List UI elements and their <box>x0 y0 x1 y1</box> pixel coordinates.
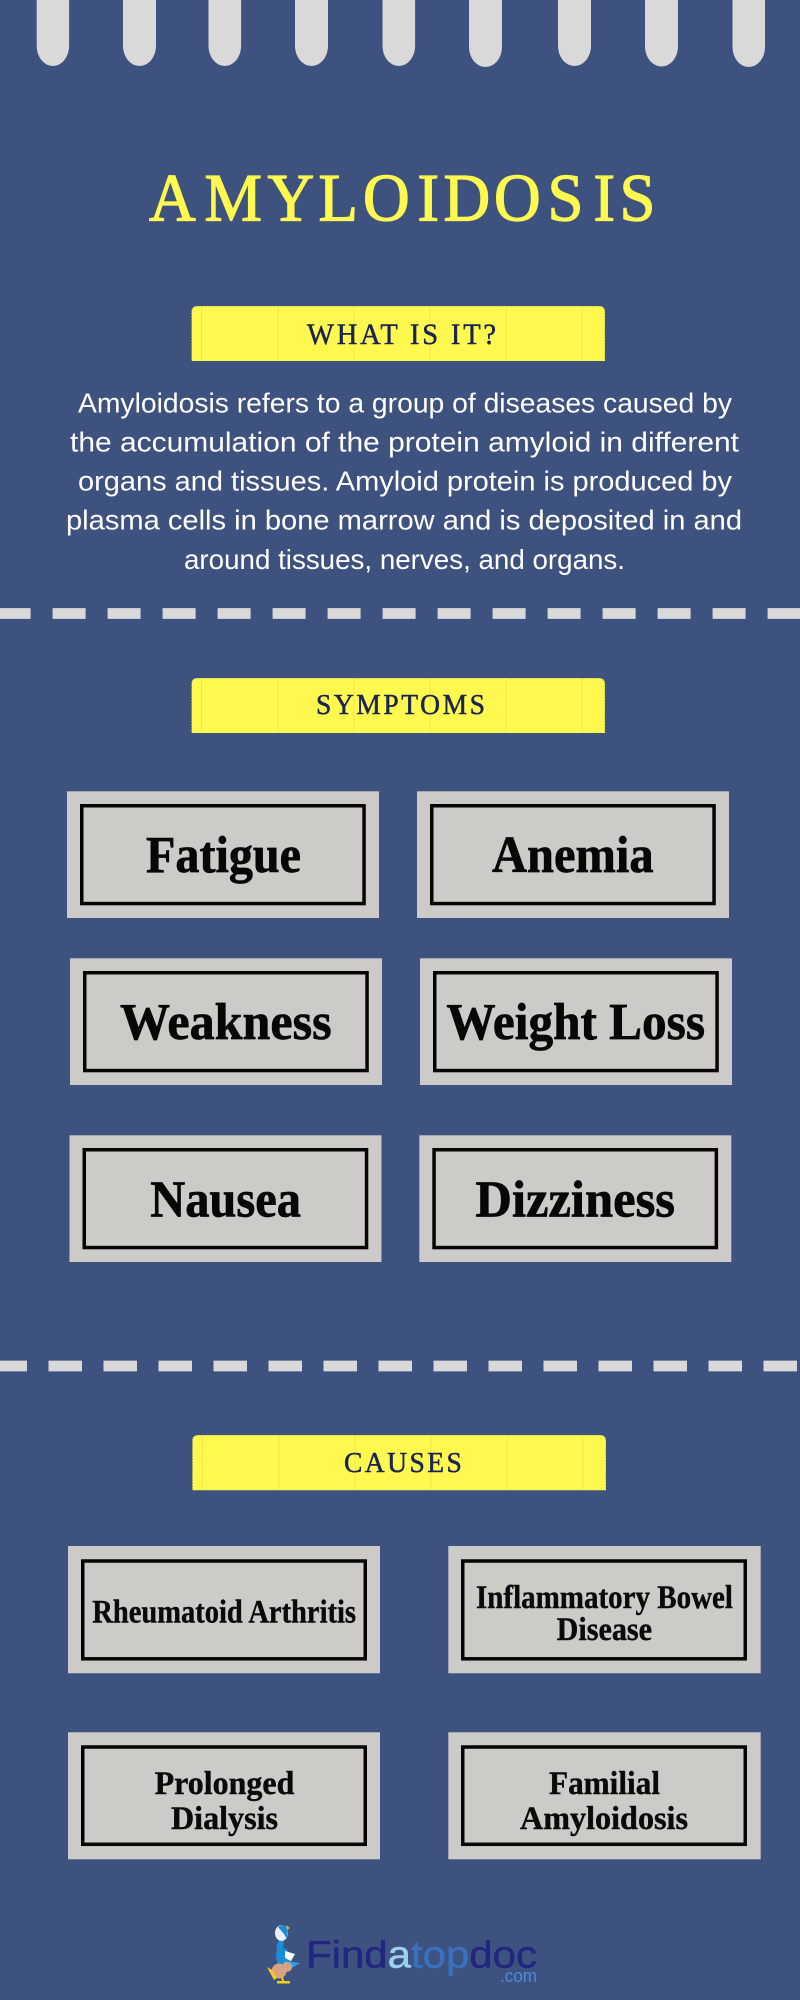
description paragraph <box>66 388 742 575</box>
cause: Inflammatory Bowel Disease <box>448 1546 761 1673</box>
symptom: Weakness: Weakness <box>120 994 332 1051</box>
icon: bird mascot <box>267 1925 300 1984</box>
cause: Prolonged Dialysis: Prolonged <box>155 1766 294 1802</box>
logo: Findatopdoc: .com <box>500 1966 537 1986</box>
logo: Findatopdoc: Findatopdoc <box>306 1934 537 1976</box>
symptom: Nausea: Nausea <box>150 1172 301 1228</box>
symptom: Dizziness <box>419 1135 731 1262</box>
description paragraph: organs and tissues. Amyloid protein is produced by <box>78 466 732 497</box>
banner: causes: CAUSES <box>344 1447 462 1479</box>
symptom: Weight Loss <box>420 958 732 1085</box>
description paragraph: around tissues, nerves, and organs. <box>184 544 625 575</box>
banner: what is it <box>192 306 605 361</box>
cause: Prolonged Dialysis <box>68 1732 380 1859</box>
symptom: Nausea <box>70 1135 382 1262</box>
symptom: Fatigue <box>67 791 379 918</box>
description paragraph: Amyloidosis refers to a group of diseases caused by <box>78 388 732 419</box>
cause: Familial Amyloidosis <box>448 1732 761 1859</box>
cause: Rheumatoid Arthritis: Rheumatoid Arthritis <box>92 1595 356 1631</box>
binder tabs <box>37 0 765 67</box>
symptom: Dizziness: Dizziness <box>475 1172 675 1228</box>
cause: Inflammatory Bowel Disease: Disease <box>557 1612 652 1648</box>
section: what is it <box>66 306 742 575</box>
description paragraph: plasma cells in bone marrow and is deposited in and <box>66 505 742 536</box>
logo: Findatopdoc <box>267 1925 537 1986</box>
section: causes <box>68 1435 761 1859</box>
cause: Familial Amyloidosis: Amyloidosis <box>520 1801 688 1837</box>
cause: Inflammatory Bowel Disease: Inflammatory Bowel <box>476 1580 733 1616</box>
banner: causes <box>192 1435 606 1490</box>
section: symptoms <box>67 678 732 1262</box>
banner: symptoms: SYMPTOMS <box>316 689 485 721</box>
symptom: Fatigue: Fatigue <box>146 827 301 884</box>
title: AMYLOIDOSIS <box>149 161 655 236</box>
symptom: Weakness <box>70 958 382 1085</box>
banner: symptoms <box>192 678 605 733</box>
description paragraph: the accumulation of the protein amyloid in different <box>70 427 739 458</box>
cause: Familial Amyloidosis: Familial <box>549 1766 660 1802</box>
symptom: Anemia: Anemia <box>492 827 654 884</box>
symptom: Anemia <box>417 791 729 918</box>
symptom: Weight Loss: Weight Loss <box>446 994 705 1051</box>
banner: what is it: WHAT IS IT? <box>307 318 496 351</box>
cause: Prolonged Dialysis: Dialysis <box>171 1801 278 1837</box>
cause: Rheumatoid Arthritis <box>68 1546 380 1673</box>
